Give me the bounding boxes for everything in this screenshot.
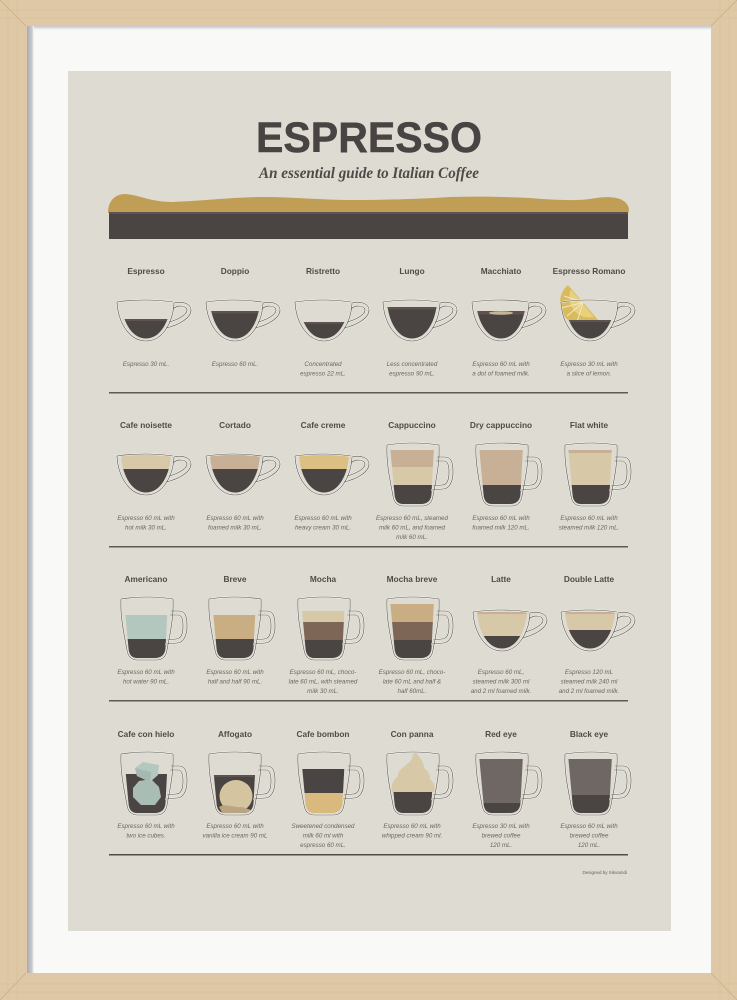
drink: Cafe bombon	[292, 729, 364, 849]
drink: Red eye: 120 mL.	[490, 842, 512, 849]
drink: Affogato	[202, 729, 275, 840]
drink: Black eye: Espresso 60 mL with	[560, 823, 618, 830]
drink: Affogato: Espresso 60 mL with	[206, 823, 264, 830]
drink: Espresso	[117, 266, 191, 368]
drink: Cafe noisette: hot milk 30 mL.	[125, 524, 167, 532]
drink: Mocha breve: Mocha breve	[387, 574, 438, 584]
drink: Mocha: Espresso 60 mL, choco-	[290, 669, 356, 676]
drink: Ristretto: Ristretto	[306, 266, 340, 276]
icon: whipped cream	[392, 752, 435, 792]
drink: Flat white: Espresso 60 mL with	[560, 515, 618, 522]
header coffee band	[108, 194, 629, 239]
drink: Lungo: espresso 90 mL.	[389, 370, 435, 378]
drink: Black eye: brewed coffee	[570, 832, 609, 840]
drink: Cafe noisette: Cafe noisette	[120, 420, 172, 430]
drink: Latte: and 2 ml foamed milk.	[471, 688, 531, 695]
drink: Flat white: steamed milk 120 mL.	[559, 524, 619, 532]
subtitle: An essential guide to Italian Coffee	[258, 165, 479, 182]
drink: Dry cappuccino	[470, 420, 542, 532]
drink: Cappuccino	[376, 420, 453, 541]
drink: Mocha breve: half 60mL.	[398, 688, 426, 695]
drink: Black eye	[560, 729, 631, 849]
drink: Cappuccino: Espresso 60 mL, steamed	[376, 515, 448, 522]
title: ESPRESSO	[256, 114, 482, 162]
drink: Mocha: late 60 mL, with steamed	[289, 678, 358, 686]
drink: Mocha: Mocha	[310, 574, 337, 584]
drink: Cafe noisette: Espresso 60 mL with	[117, 515, 175, 522]
row 3	[117, 574, 635, 695]
drink: Doppio: Espresso 60 mL.	[212, 361, 258, 368]
drink: Latte: steamed milk 300 ml	[473, 678, 530, 686]
drink: Latte: Latte	[491, 574, 511, 584]
drink: Cafe con hielo: two ice cubes.	[126, 832, 166, 840]
drink: Cafe bombon: milk 60 ml with	[303, 832, 344, 840]
drink: Con panna: whipped cream 90 ml.	[382, 832, 442, 840]
drink: Con panna: Con panna	[391, 729, 434, 739]
drink: Espresso Romano: a slice of lemon.	[567, 370, 611, 378]
drink: Macchiato: Espresso 60 mL with	[472, 361, 530, 368]
drink: Cafe creme: Cafe creme	[301, 420, 346, 430]
drink: Flat white: Flat white	[570, 420, 609, 430]
drink: Mocha: milk 30 mL.	[307, 688, 339, 695]
poster background	[68, 71, 671, 931]
drink: Macchiato	[472, 266, 546, 378]
drink: Cafe con hielo	[117, 729, 187, 840]
crema wave	[108, 194, 629, 213]
drink: Affogato: Affogato	[218, 729, 252, 739]
drink: Mocha breve: Espresso 60 mL, choco-	[379, 669, 445, 676]
drink: Latte: Espresso 60 mL,	[478, 669, 524, 676]
drink: Red eye: Espresso 30 mL with	[472, 823, 530, 830]
designer credit: Designed by Sikvamdi	[582, 870, 627, 875]
icon: lemon slice	[560, 285, 598, 321]
drink: Macchiato: Macchiato	[481, 266, 521, 276]
drink: Double Latte: Espresso 120 mL	[565, 669, 613, 676]
drink: Doppio	[206, 266, 280, 368]
drink: Cappuccino: milk 60 mL, and foamed	[379, 524, 446, 532]
drink: Lungo: Less concentrated	[387, 361, 437, 368]
drink: Red eye: brewed coffee	[482, 832, 521, 840]
drink: Cafe creme: heavy cream 30 mL.	[295, 524, 351, 532]
drink: Ristretto	[295, 266, 369, 378]
drink: Macchiato: a dot of foamed milk.	[472, 370, 530, 378]
drink: Cortado: Espresso 60 mL with	[206, 515, 264, 522]
drink: Cafe bombon: espresso 60 mL.	[300, 842, 346, 849]
drink: Cappuccino: milk 60 mL.	[396, 534, 428, 541]
drink: Double Latte: and 2 ml foamed milk.	[559, 688, 619, 695]
drink: Cafe con hielo: Cafe con hielo	[118, 729, 174, 739]
drink: Black eye: 120 mL.	[578, 842, 600, 849]
drink: Ristretto: Concentrated	[304, 361, 342, 368]
row 4	[117, 729, 631, 849]
row 1	[117, 266, 635, 378]
drink: Doppio: Doppio	[221, 266, 249, 276]
drink: Ristretto: espresso 22 mL.	[300, 370, 346, 378]
drink: Black eye: Black eye	[570, 729, 609, 739]
drink: Red eye	[472, 729, 542, 849]
drink: Latte	[471, 574, 547, 695]
drink: Con panna	[382, 729, 453, 840]
drink: Breve	[206, 574, 275, 686]
drink: Double Latte: steamed milk 240 ml	[561, 678, 618, 686]
drink: Cafe bombon: Sweetened condensed	[292, 823, 354, 830]
drink: Americano: Americano	[125, 574, 167, 584]
icon: ice cubes	[133, 762, 161, 805]
drink: Red eye: Red eye	[485, 729, 517, 739]
drink: Cafe noisette	[117, 420, 191, 532]
drink: Con panna: Espresso 60 mL with	[383, 823, 441, 830]
drink: Dry cappuccino: Espresso 60 mL with	[472, 515, 530, 522]
drink: Cafe creme: Espresso 60 mL with	[294, 515, 352, 522]
drink: Espresso: Espresso 30 mL.	[123, 361, 169, 368]
drink: Cortado	[206, 420, 280, 532]
drink: Breve: half and half 90 mL.	[208, 678, 262, 686]
drink: Double Latte	[559, 574, 635, 695]
drink: Dry cappuccino: foamed milk 120 mL.	[472, 524, 530, 532]
drink: Cafe creme	[294, 420, 369, 532]
drink: Lungo: Lungo	[399, 266, 425, 276]
drink: Espresso: Espresso	[127, 266, 165, 276]
drink: Affogato: vanilla ice cream 90 mL	[202, 832, 268, 840]
drink: Breve: Espresso 60 mL with	[206, 669, 264, 676]
drink: Dry cappuccino: Dry cappuccino	[470, 420, 532, 430]
drink: Breve: Breve	[223, 574, 247, 584]
drink: Double Latte: Double Latte	[564, 574, 615, 584]
drink: Americano: Espresso 60 mL with	[117, 669, 175, 676]
drink: Cortado: Cortado	[219, 420, 251, 430]
row 2	[117, 420, 631, 541]
drink: Espresso Romano: Espresso 30 mL with	[560, 361, 618, 368]
drink: Cortado: foamed milk 30 mL.	[208, 524, 262, 532]
drink: Mocha breve	[379, 574, 453, 695]
drink: Cappuccino: Cappuccino	[388, 420, 436, 430]
drink: Americano: hot water 90 mL.	[123, 678, 169, 686]
drink: Flat white	[559, 420, 631, 532]
coffee base	[109, 212, 628, 239]
drink: Espresso Romano	[553, 266, 635, 378]
drink: Espresso Romano: Espresso Romano	[553, 266, 625, 276]
drink: Cafe con hielo: Espresso 60 mL with	[117, 823, 175, 830]
drink: Americano	[117, 574, 187, 686]
drink: Cafe bombon: Cafe bombon	[296, 729, 350, 739]
drink: Mocha	[289, 574, 364, 695]
drink: Mocha breve: late 60 mL and half &	[383, 678, 441, 686]
drink: Lungo	[383, 266, 457, 378]
